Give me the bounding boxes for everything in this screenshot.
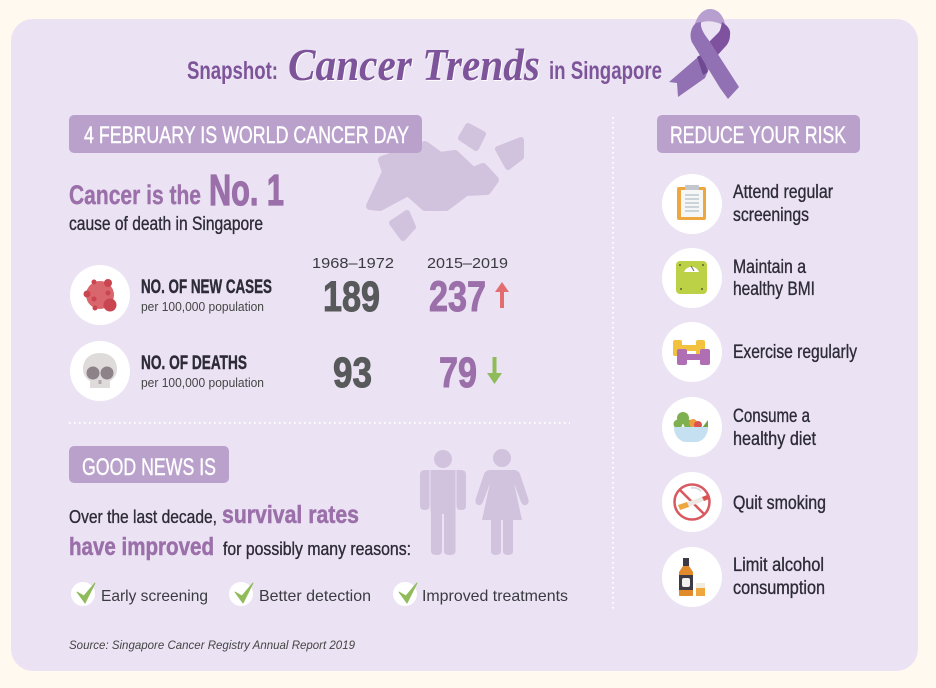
row: new cases: per 100,000 population [141, 299, 264, 314]
year labels [312, 255, 508, 272]
item: quit smoking [662, 472, 826, 532]
heading: reduce your risk: REDUCE YOUR RISK [670, 122, 846, 149]
row: deaths: 93 [333, 349, 372, 397]
item: screenings: screenings [733, 205, 809, 226]
text: survival rates [69, 501, 411, 561]
icon: cancer cell [70, 265, 130, 325]
row: deaths: NO. OF DEATHS [141, 352, 247, 374]
item: diet: healthy diet [733, 429, 817, 450]
item: BMI: Maintain a [733, 257, 806, 278]
item: screenings [662, 174, 834, 234]
icon: man and woman silhouettes [420, 449, 529, 555]
item: exercise: Exercise regularly [733, 342, 857, 363]
icon: skull [70, 341, 130, 401]
checklist: reasons: Early screening [101, 588, 208, 605]
heading: world cancer day: 4 FEBRUARY IS WORLD CANCER DAY [84, 122, 409, 149]
text: cancer is the no. 1: Cancer is the [69, 180, 201, 210]
text: survival rates: survival rates [222, 501, 359, 529]
heading: good news: GOOD NEWS IS [82, 454, 216, 481]
icon: Singapore map silhouette [370, 126, 521, 238]
heading: good news [69, 446, 229, 483]
item: quit smoking: Quit smoking [733, 493, 826, 514]
checklist: reasons: Improved treatments [422, 588, 568, 605]
icon: purple ribbon [669, 9, 739, 99]
item: diet [662, 397, 817, 457]
arrow: up [495, 282, 509, 308]
item: alcohol: Limit alcohol [733, 555, 824, 576]
heading: world cancer day [69, 115, 422, 153]
item: exercise [662, 322, 857, 382]
heading: reduce your risk [657, 115, 860, 153]
text: cancer is the no. 1: cause of death in Singapore [69, 214, 263, 235]
year labels: 1968–1972 [312, 255, 394, 272]
text: survival rates: have improved [69, 533, 214, 561]
checklist: reasons: Better detection [259, 588, 371, 605]
item: screenings: Attend regular [733, 182, 834, 203]
item: BMI: healthy BMI [733, 279, 815, 300]
row: new cases: 237 [429, 273, 486, 321]
row: deaths: per 100,000 population [141, 375, 264, 390]
item: BMI [662, 248, 815, 308]
row: new cases: 189 [323, 273, 380, 321]
title: Snapshot: [187, 57, 278, 85]
source note: Source: Singapore Cancer Registry Annual Report 2019 [69, 638, 355, 652]
checklist: reasons [71, 582, 568, 606]
row: new cases: NO. OF NEW CASES [141, 276, 272, 298]
text: survival rates: Over the last decade, [69, 507, 217, 527]
item: alcohol: consumption [733, 578, 825, 599]
text: cancer is the no. 1 [69, 166, 284, 235]
arrow: down [487, 357, 502, 384]
row: deaths [141, 349, 477, 397]
text: cancer is the no. 1: No. 1 [209, 166, 284, 215]
item: alcohol [662, 547, 825, 607]
text: survival rates: for possibly many reasons: [223, 539, 411, 559]
title [187, 39, 662, 90]
row: deaths: 79 [439, 349, 477, 397]
title: in Singapore [549, 57, 662, 85]
row: new cases [141, 273, 486, 321]
year labels: 2015–2019 [427, 255, 508, 272]
title: Cancer Trends [288, 39, 540, 90]
item: diet: Consume a [733, 406, 810, 427]
